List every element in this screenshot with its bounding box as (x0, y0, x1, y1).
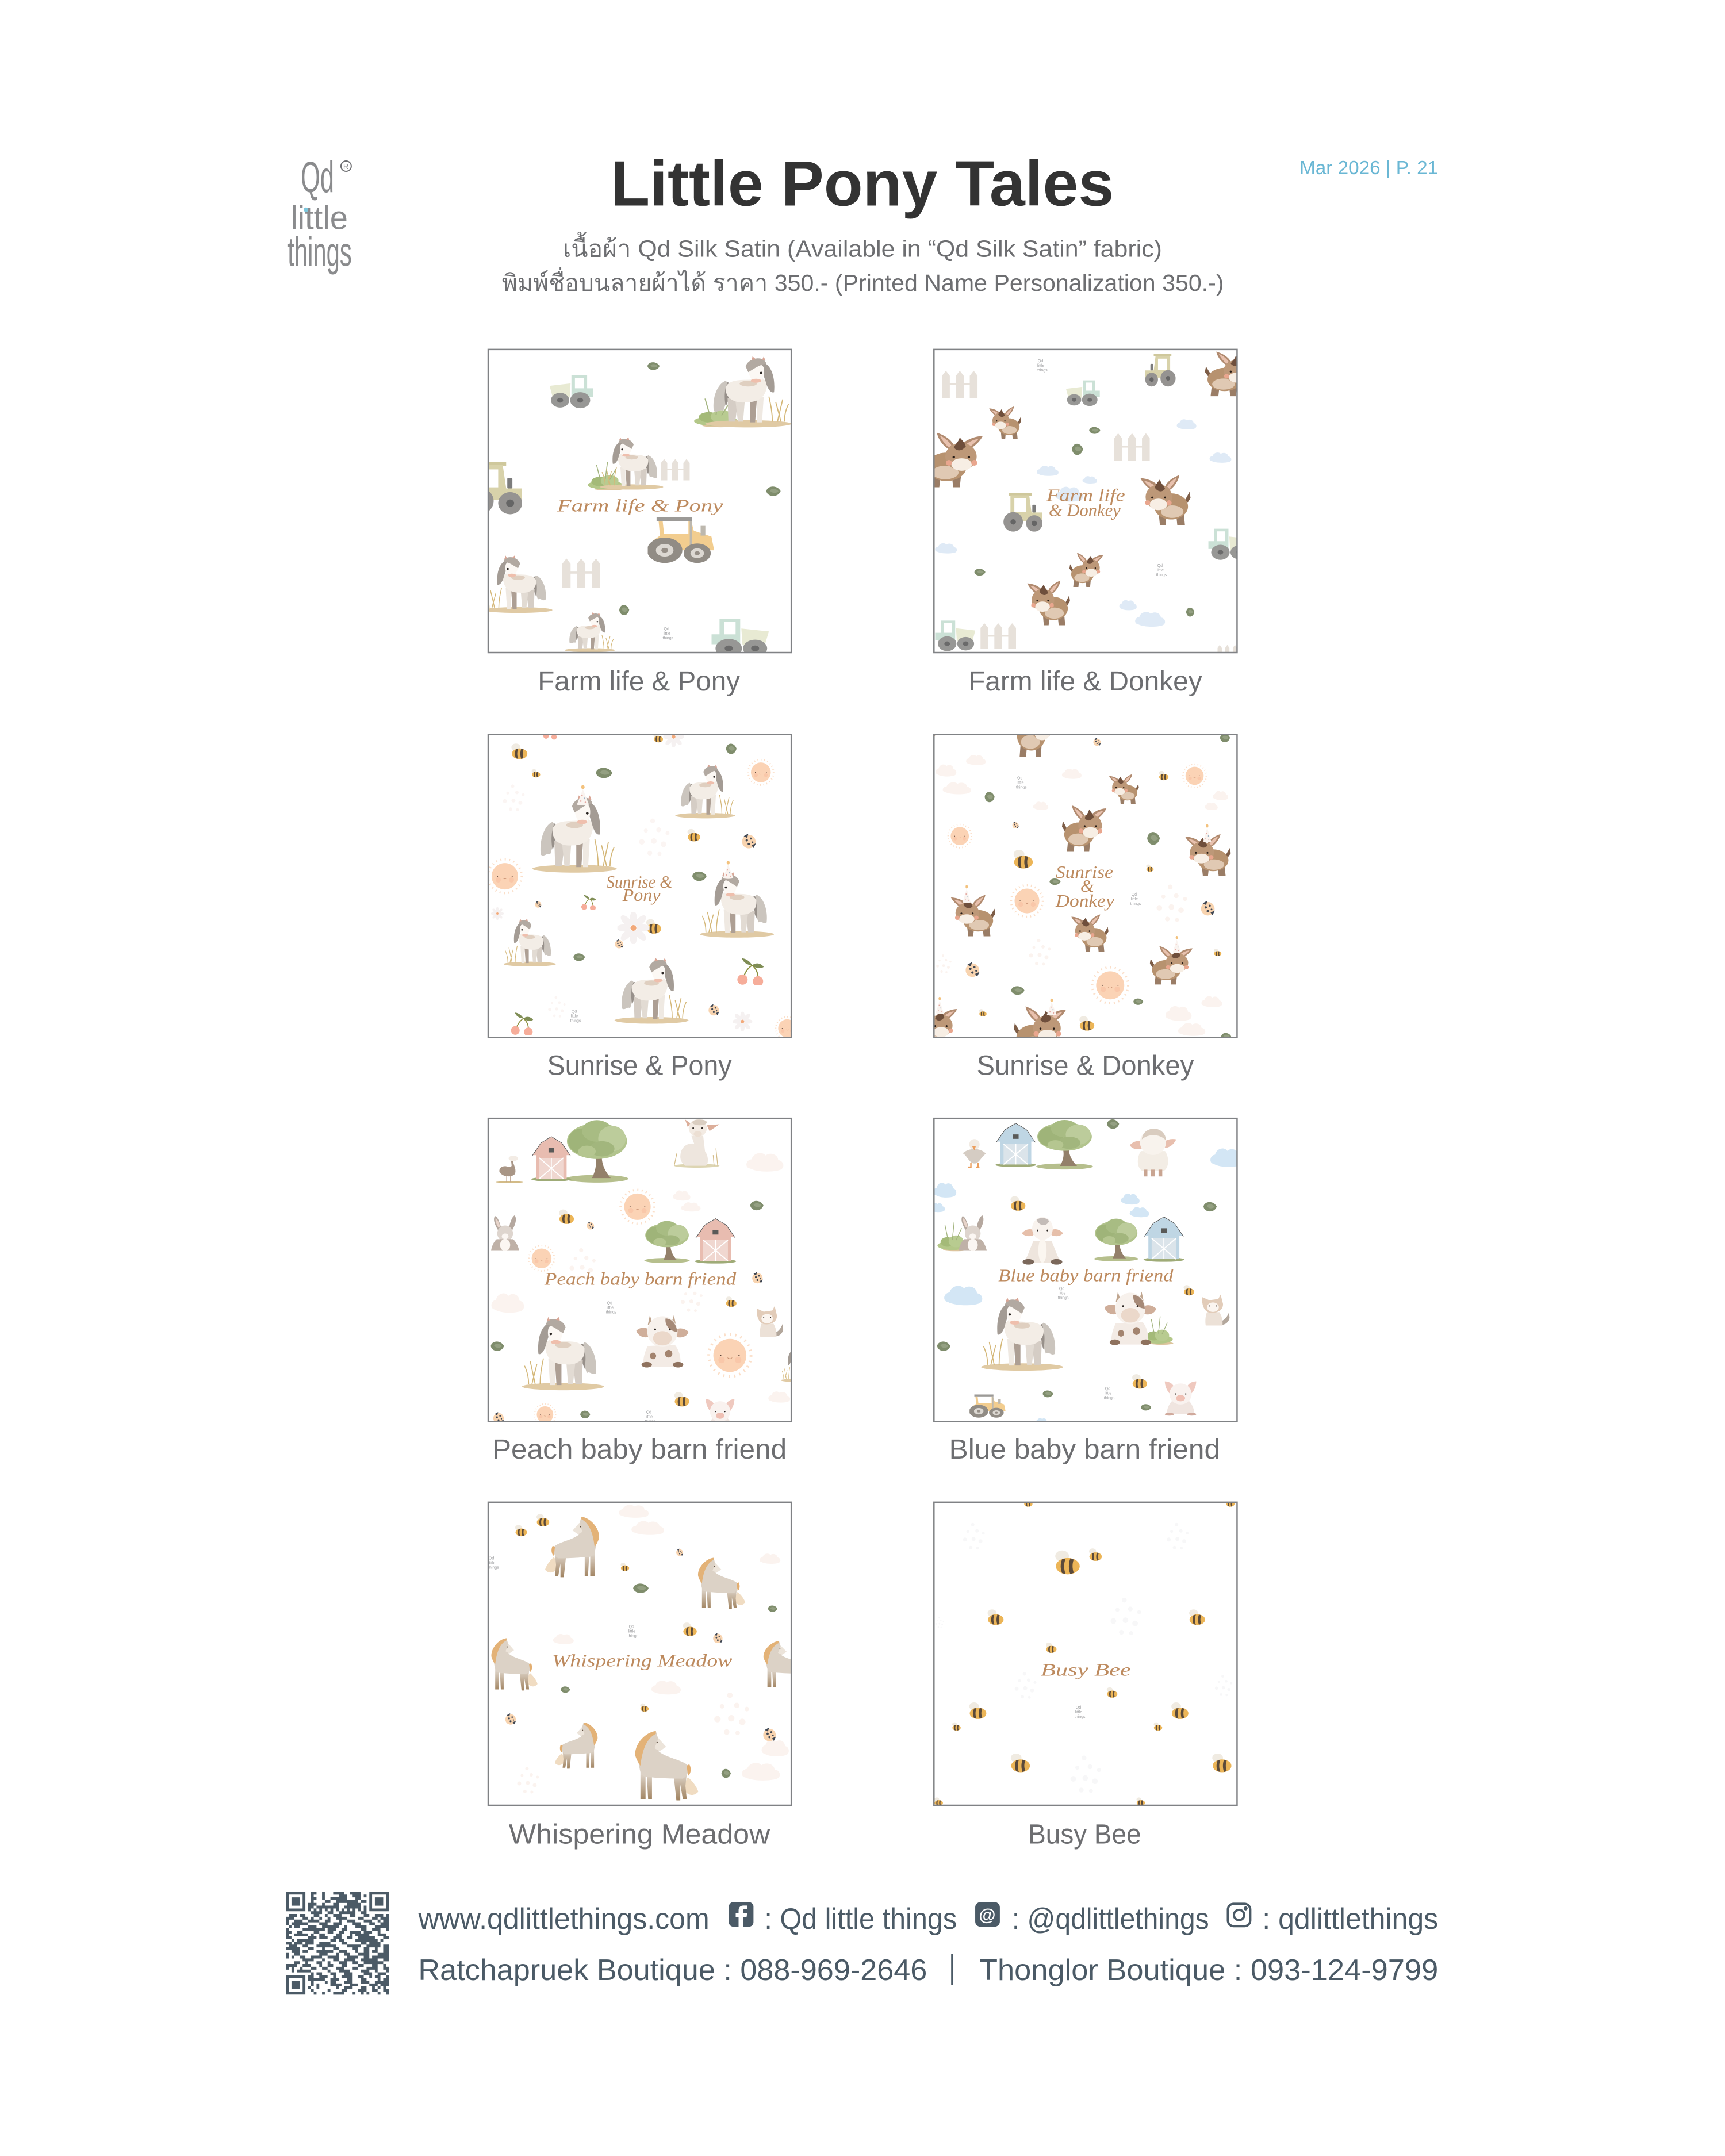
mini logos: things (488, 1566, 499, 1570)
barns and trees (531, 1120, 736, 1264)
swatch border (934, 1502, 1237, 1805)
swatch border (488, 1118, 791, 1421)
bees (511, 733, 700, 934)
script name (1046, 485, 1125, 520)
panel: Peach baby barn friend (488, 1118, 815, 1465)
farm animals (491, 1119, 815, 1433)
icon: instagram (1228, 1904, 1250, 1926)
bees (515, 1514, 697, 1712)
mini logos (1058, 1287, 1115, 1400)
donkeys (912, 702, 1230, 1056)
logo: Qd little things: R (343, 162, 348, 171)
script name: & (1080, 876, 1094, 896)
swatch border (488, 1502, 791, 1805)
mini logos (1037, 359, 1167, 577)
mini logos: things (1130, 902, 1141, 906)
mini logos: little (1037, 364, 1045, 368)
caption: Sunrise & Donkey (977, 1050, 1194, 1081)
script name: Farm life (1046, 485, 1125, 505)
mini logos: little (1059, 1292, 1065, 1296)
panel: Blue baby barn friend (929, 1118, 1243, 1465)
pale clouds and dots (492, 1153, 790, 1403)
bees (979, 771, 1221, 1031)
ladybugs (493, 1222, 763, 1424)
footer divider (951, 1954, 953, 1985)
icon: threads: @ (979, 1905, 996, 1924)
suns (529, 1190, 751, 1425)
script name: Whispering Meadow (552, 1650, 733, 1670)
script name: Sunrise (1056, 862, 1113, 882)
mini logo: little (664, 632, 670, 636)
mini logos (488, 1557, 639, 1638)
caption: Busy Bee (1028, 1820, 1141, 1850)
script name: Blue baby barn friend (998, 1265, 1174, 1286)
mini logos: things (606, 1311, 617, 1315)
mini logos: little (607, 1306, 614, 1310)
tractors (935, 354, 1248, 651)
mini logos: things (628, 1634, 639, 1638)
logo: Qd little things: little (290, 200, 348, 237)
ladybugs (505, 1548, 776, 1741)
leaves (490, 1201, 764, 1418)
leaves (985, 734, 1231, 1040)
footer: threads name: : @qdlittlethings (1012, 1902, 1209, 1935)
date and page number: Mar 2026 | P. 21 (1300, 157, 1438, 178)
caption: Peach baby barn friend (492, 1434, 787, 1465)
mini logos: Qd (1059, 1287, 1064, 1291)
mini logos: things (1058, 1296, 1069, 1300)
mini logos: things (645, 1420, 656, 1424)
swatch border (934, 350, 1237, 653)
subtitle: personalization line: พิมพ์ชื่อบนลายผ้าได้ ราคา 350.- (Printed Name Personalization 350.-) (502, 267, 1224, 296)
panel: Busy Bee (934, 1498, 1237, 1850)
script name: Sunrise & (607, 872, 673, 892)
logo: Qd little things: Qd (301, 153, 334, 202)
logo: Qd little things (288, 153, 352, 275)
mini logos: things (1156, 573, 1167, 577)
panel: Whispering Meadow (488, 1502, 811, 1850)
script name: Farm life & Pony (557, 495, 723, 515)
mini logos: little (1017, 781, 1024, 785)
ladybugs (965, 738, 1215, 977)
mini logos: Qd (607, 1302, 612, 1306)
mini logo: Qd (1076, 1706, 1081, 1710)
footer: Thonglor boutique phone: Thonglor Boutique : 093-124-9799 (979, 1953, 1438, 1986)
leaves (619, 362, 781, 615)
mini logos: things (1037, 369, 1048, 373)
swatch border (488, 350, 791, 653)
QR code (286, 1892, 389, 1994)
cherries (511, 725, 764, 1036)
fences (562, 459, 689, 588)
mini logos: Qd (1105, 1387, 1110, 1391)
bees (559, 1210, 737, 1406)
mini logo: things (570, 1019, 581, 1023)
bees (934, 1498, 1235, 1806)
farm animals (937, 1129, 1229, 1415)
leaves (937, 1119, 1217, 1410)
panel: Farm life & Donkey (923, 350, 1256, 697)
blue clouds (929, 1149, 1243, 1425)
mini logos: things (1104, 1396, 1115, 1400)
tractors (465, 375, 769, 658)
mini logos: little (646, 1415, 653, 1419)
mini logo: little (571, 1015, 578, 1019)
mini logos: Qd (489, 1557, 494, 1561)
mini logo: Qd (572, 1010, 577, 1014)
ponies (484, 356, 791, 652)
page content (286, 148, 1438, 1994)
mini logos: little (1131, 897, 1138, 901)
subtitle: fabric line: เนื้อผ้า Qd Silk Satin (Available in “Qd Silk Satin” fabric) (563, 231, 1162, 262)
mini logo: Qd (664, 627, 669, 631)
mini logo: little (1075, 1710, 1082, 1714)
ladybugs (535, 834, 756, 1015)
horses (492, 1517, 811, 1800)
panel: Sunrise & Donkey (912, 702, 1237, 1081)
mini logos: little (1105, 1391, 1111, 1395)
icon: threads (975, 1902, 1000, 1927)
mini logo: things (663, 636, 674, 640)
mini logos (606, 1302, 656, 1424)
caption: Farm life & Donkey (968, 666, 1202, 697)
barns and trees (995, 1120, 1184, 1262)
icon: facebook (729, 1902, 753, 1927)
leaves (573, 744, 737, 961)
mini logo: things (1075, 1715, 1086, 1719)
mini logos: Qd (1017, 776, 1022, 780)
mini logos: Qd (1038, 359, 1043, 363)
footer: Ratchapruek boutique phone: Ratchapruek Boutique : 088-969-2646 (418, 1953, 927, 1986)
mini logos (1016, 776, 1141, 906)
logo: Qd little things: things (288, 229, 352, 275)
mini logos: things (1016, 785, 1027, 789)
bees (1010, 1196, 1194, 1388)
caption: Sunrise & Pony (547, 1050, 732, 1081)
pale clouds and dots (936, 755, 1228, 1036)
caption: Blue baby barn friend (949, 1434, 1220, 1465)
leaves (975, 427, 1194, 616)
footer: facebook name: : Qd little things (764, 1902, 957, 1935)
script name (607, 872, 673, 905)
swatch border (934, 735, 1237, 1038)
daisies (491, 726, 753, 1031)
title: Little Pony Tales (611, 148, 1114, 220)
donkeys (923, 351, 1256, 625)
mini logos: Qd (646, 1410, 651, 1414)
panel: Farm life & Pony (465, 350, 791, 697)
swatch border (488, 735, 791, 1038)
ponies with party hats (504, 764, 774, 1024)
caption: Farm life & Pony (538, 666, 740, 697)
script name: Busy Bee (1041, 1659, 1131, 1679)
caption: Whispering Meadow (509, 1820, 770, 1850)
script name: & Donkey (1049, 500, 1121, 520)
panel: Sunrise & Pony (488, 725, 799, 1081)
swatch border (934, 1118, 1237, 1421)
footer: website: www.qdlittlethings.com (417, 1902, 710, 1935)
faint dots (503, 784, 669, 1018)
script name: Donkey (1055, 891, 1114, 911)
mini logos: little (628, 1629, 635, 1633)
footer: instagram name: : qdlittlethings (1262, 1902, 1438, 1935)
mini logos: little (1157, 569, 1164, 573)
fences (942, 371, 1237, 662)
suns (948, 764, 1206, 1003)
pale grey dots (935, 1523, 1232, 1793)
mini logos: Qd (1132, 893, 1137, 897)
script name: Pony (622, 885, 661, 905)
suns (488, 759, 799, 1040)
mini logos: little (488, 1562, 496, 1566)
mini logos: Qd (1157, 564, 1163, 568)
script name (1055, 862, 1114, 911)
mini logos: Qd (629, 1625, 634, 1629)
script name: Peach baby barn friend (544, 1269, 737, 1289)
leaves (561, 1583, 777, 1778)
clouds (935, 419, 1231, 627)
yellow tractor (969, 1394, 1006, 1418)
pale clouds and dots (517, 1505, 789, 1794)
